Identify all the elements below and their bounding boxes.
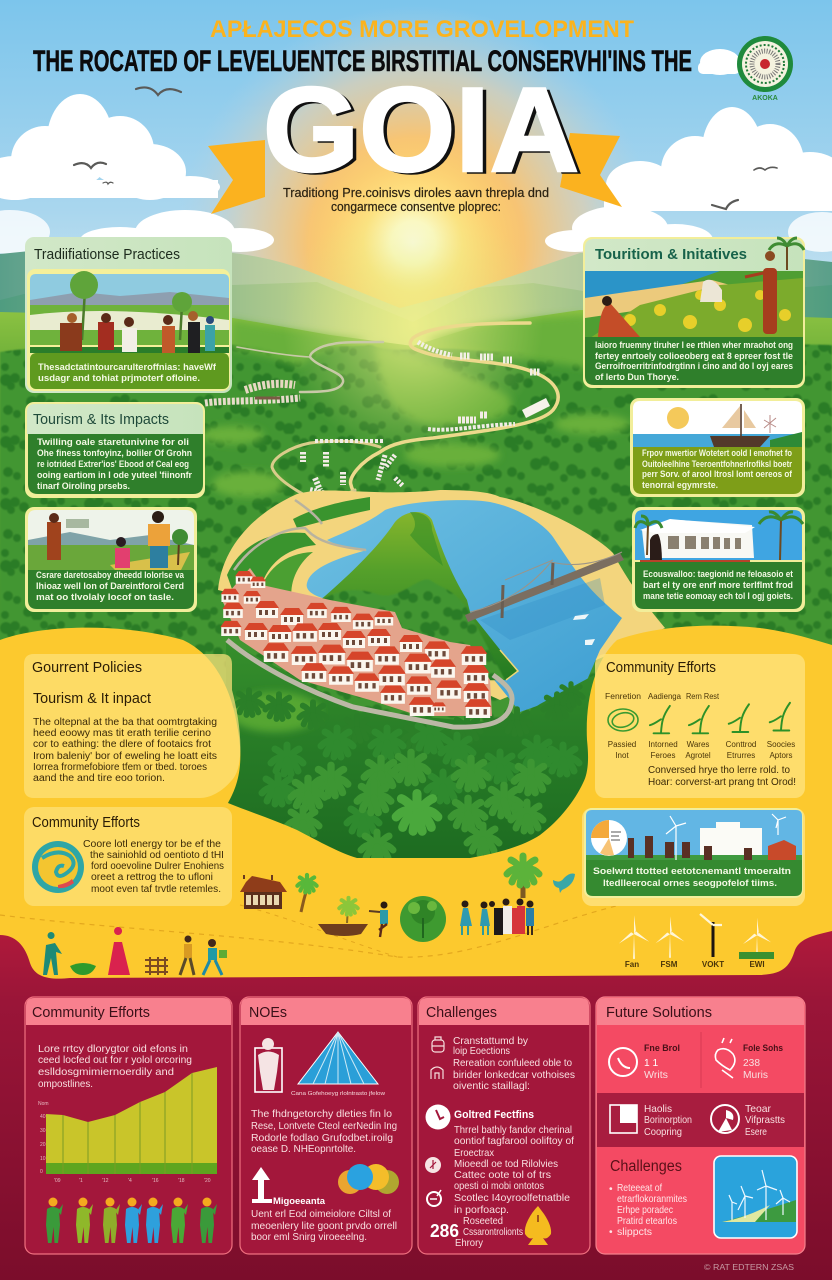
title: GOIA: GOIA: [267, 65, 583, 199]
text block: moot even taf trvtle retemles.: [91, 884, 221, 895]
icons: green turbines: [650, 703, 790, 733]
text block: birider lonkedcar vothoises: [453, 1070, 575, 1081]
text block: [83, 839, 224, 895]
text block: meoenlery lite goont prvdo orrell: [251, 1221, 397, 1232]
text block: [648, 765, 796, 788]
panel: traditional practices: [25, 237, 232, 393]
text block: ceed locfed out for r yolol orcoring: [38, 1055, 192, 1066]
icon: ring: [609, 1048, 637, 1076]
text block: Eroectrax: [454, 1148, 494, 1159]
row: white wind turbines: EWI: [749, 960, 765, 969]
text block: bart el ty ore enrf more terlflmt frod: [643, 580, 793, 591]
icon labels bottom: Passied: [608, 740, 636, 749]
text block: Ecouswalloo: taegionid ne feloasoio et: [643, 569, 794, 580]
illustration: crowd: [460, 898, 534, 935]
area chart: '1: [79, 1178, 83, 1184]
heading: Community Efforts: [32, 1005, 150, 1021]
bridge: [465, 552, 624, 645]
text block: [33, 717, 217, 784]
illustration: tourists: [28, 511, 194, 575]
area chart: 30: [40, 1128, 46, 1134]
text block: of lerto Dun Thorye.: [595, 372, 679, 383]
text block: Twilling oale staretunivine for oli: [37, 437, 189, 448]
text block: [38, 1044, 192, 1090]
icon: book: [610, 1105, 637, 1133]
heading: Future Solutions: [606, 1005, 712, 1021]
text block: Esere: [745, 1127, 767, 1138]
illustration: town and people: [586, 810, 802, 863]
stat: second: [743, 1043, 783, 1081]
icon labels bottom: Agrotel: [685, 751, 711, 760]
subheading: Challenges: [610, 1158, 682, 1175]
illustration: offshore wind farm: [714, 1156, 797, 1238]
icon: hand outline: [715, 1038, 735, 1078]
icon labels top: Aadienga: [648, 692, 682, 701]
text block: Borinorption: [644, 1115, 692, 1126]
stat: first: Writs: [644, 1070, 668, 1081]
text block: cor to eathing: the dlere of footaics frot: [33, 739, 211, 750]
subtitle: Traditiong Pre.coinisvs diroles aavn threpla dnd: [283, 186, 549, 200]
text block: [36, 570, 185, 603]
text block: oreet a rettrog the to ufloni: [91, 872, 213, 883]
panel: community efforts chart: [25, 997, 232, 1254]
illustration: people in a field: [30, 271, 229, 356]
bullet list: •: [609, 1227, 613, 1238]
meadows: [200, 315, 630, 497]
text block: [643, 569, 794, 602]
figure: walker teal: [43, 932, 62, 975]
illustration: coast and flowers: [585, 238, 804, 338]
text block: oease D. NHEopnrtolte.: [251, 1144, 356, 1155]
icons: small clock and target: [425, 1157, 441, 1206]
row: workers: [46, 1198, 217, 1243]
text block: oontiof tagfarool ooliftoy of: [454, 1136, 574, 1147]
text block: [453, 1036, 575, 1092]
bullet list: Reteeeat of: [617, 1183, 662, 1194]
text block: The fhdngetorchy dleties fin lo: [251, 1109, 392, 1120]
text block: boor eml Snirg viroeeelng.: [251, 1232, 367, 1243]
island gardens: [293, 497, 370, 528]
illustration: white building: [635, 510, 803, 565]
area chart: '16: [152, 1178, 159, 1184]
heading: NOEs: [249, 1005, 287, 1021]
icon labels top: Rern Rest: [686, 692, 720, 701]
panel: government policies: [24, 654, 240, 798]
stat: second: Muris: [743, 1070, 768, 1081]
copyright: © RAT EDTERN ZSAS: [704, 1263, 794, 1272]
text block: Hoar: corverst-art prang tnt Orod!: [648, 777, 796, 788]
stat caption: [455, 1216, 523, 1249]
area chart: 10: [40, 1156, 46, 1162]
heading: Touritiom & Initatives: [595, 247, 747, 263]
icon: globe circle: [711, 1105, 739, 1133]
bullet list: Pratird etearlos: [617, 1216, 677, 1227]
overlapping circles: [338, 1164, 399, 1194]
stat: second: 238: [743, 1058, 760, 1069]
winding road: [237, 323, 558, 522]
figure: walker pink: [108, 927, 130, 975]
row: white wind turbines: Fan: [625, 960, 639, 969]
area chart: '12: [102, 1178, 109, 1184]
subheading: Migoeeanta: [273, 1196, 326, 1207]
icon: clock: [426, 1104, 450, 1130]
area chart: 20: [40, 1142, 46, 1148]
illustration: palm trees: [297, 856, 539, 923]
text block: Ohe finess tonfoyinz, boliler Of Grohn: [37, 448, 192, 459]
icon: teal bird: [553, 874, 575, 893]
panel: future solutions: [596, 997, 805, 1254]
text block: Ihioaz well lon of Dareintforoi Cerd: [36, 581, 184, 592]
hillside villages: [205, 342, 548, 496]
illustration: house: [240, 875, 287, 909]
text block: tinarf Oiroling prsebs.: [37, 481, 130, 492]
village: [220, 568, 492, 718]
icon labels bottom: Intorned: [648, 740, 678, 749]
heading: Tradiifiationse Practices: [34, 247, 180, 263]
text block: perr Sorv. of arool ltrosl lomt oereos of: [642, 469, 793, 480]
text block: re iotrided Extrer'ios' Ebood of Ceal eog: [37, 459, 189, 470]
icon: green basket: [70, 963, 96, 975]
text block: Gerroifroerritrinfodrgtinn i cino and do I oyj eares: [595, 361, 793, 372]
panel: tourism and its impacts: [25, 402, 205, 498]
icon labels bottom: Inot: [615, 751, 629, 760]
text block: tenorral egymrste.: [642, 480, 718, 491]
text block: Teoar: [745, 1104, 772, 1115]
stat: first: 1 1: [644, 1058, 658, 1069]
text block: Haolis: [644, 1104, 672, 1115]
icon labels bottom: Feroes: [651, 751, 675, 760]
text block: Rereation confuleed oble to: [453, 1058, 572, 1069]
text block: Vifprastts: [745, 1115, 785, 1126]
panel: community efforts left: [24, 807, 232, 906]
text block: the sainiohld od oentioto d tHI: [90, 850, 224, 861]
icon labels bottom: Conttrod: [726, 740, 756, 749]
beach and lake: [218, 490, 665, 712]
subtitle: [283, 186, 549, 214]
text block: Mioeedl oe tod Rilolvies: [454, 1159, 558, 1170]
subtitle: congarmece consentve ploprec:: [331, 200, 501, 214]
heading: Community Efforts: [32, 815, 140, 831]
area chart: [38, 1067, 217, 1184]
icon labels bottom: Etrurres: [727, 751, 755, 760]
text block: Soelwrd ttotted eetotcnemantl tmoeraltn: [593, 866, 791, 877]
text block: [454, 1125, 574, 1216]
stat: first: [644, 1043, 680, 1081]
text block: Iorrea frormefobiore tfem or tbed. toroes: [33, 762, 207, 773]
area chart: '09: [54, 1178, 61, 1184]
stat: second: Fole Sohs: [743, 1043, 783, 1054]
area chart: 0: [40, 1169, 43, 1175]
panel: ship and coast: [630, 398, 805, 497]
text block: [593, 866, 791, 889]
subheading: Tourism & It inpact: [33, 691, 151, 707]
text block: Rese, Lontvete Cteol eerNedin Ing: [251, 1121, 397, 1132]
figure: walker blue: [203, 939, 227, 975]
text block: Frpov mwertior Wotetert oold I emofnet fo: [642, 448, 792, 459]
text block: [251, 1209, 397, 1243]
text block: Thrrel bathly fandor cherinal: [454, 1125, 572, 1136]
text block: ltedlleerocal ornes seogpofelof tiims.: [603, 878, 777, 889]
text block: mat oo tlvolaly locof on tasle.: [36, 592, 174, 603]
text block: Cranstattumd by: [453, 1036, 529, 1047]
panel: challenges: [418, 997, 590, 1254]
text block: Lore rrtcy dlorygtor oid efons in: [38, 1044, 188, 1055]
text block: Scotlec I4oyroolfetnatble: [454, 1193, 570, 1204]
pyramid diagram: [291, 1032, 385, 1097]
statistic: 286: [430, 1221, 459, 1241]
illustration: green globe: [400, 896, 446, 942]
bullet list: etrarflokoranmites: [617, 1194, 687, 1205]
coastal road: [227, 640, 512, 727]
text block: usdagr and tohiat prjmoterf ofloine.: [38, 373, 200, 384]
panel: community efforts right: [595, 654, 805, 798]
area chart: Nom: [38, 1101, 49, 1107]
heading: Gourrent Policies: [32, 660, 142, 676]
emblem: AKOKA: [752, 95, 778, 102]
row: village figures: [43, 927, 227, 975]
text block: loip Eoections: [453, 1046, 510, 1057]
text block: opesti oi mobi ontotos: [454, 1181, 544, 1192]
emblem: [737, 36, 793, 102]
text block: heed eoowy mas tit erath terilie cerino: [33, 728, 212, 739]
heading: Community Efforts: [606, 660, 716, 676]
area chart: '20: [204, 1178, 211, 1184]
stat caption: Ehrory: [455, 1238, 484, 1249]
text block: Conversed hrye tho lerre rold. to: [648, 765, 791, 776]
icon labels top: Fenretion: [605, 692, 641, 701]
icon: figure: [255, 1038, 282, 1092]
area chart: '4: [128, 1178, 132, 1184]
text block: Coopring: [644, 1127, 682, 1138]
text block: ford ooevoline Dulrer Enohiens: [91, 861, 224, 872]
pyramid diagram: Cana Gofehoeyg rlolntrasto jfelow: [291, 1091, 385, 1097]
row: white wind turbines: FSM: [661, 960, 678, 969]
stat caption: Cssarontrolionts: [463, 1227, 523, 1238]
text block: Csrare daretosaboy dheedd Iolorlse va: [36, 570, 185, 581]
text block: in porfoacp.: [454, 1205, 509, 1216]
icons: backpack and building: [431, 1037, 444, 1079]
icon labels bottom: [608, 740, 795, 760]
bullet list: [609, 1183, 687, 1238]
panel: NOEs: [240, 997, 412, 1254]
icon: wooden fence: [145, 957, 168, 975]
figure: walker brown: [180, 936, 194, 975]
text block: [642, 448, 793, 491]
text block: oiventic staillagl:: [453, 1081, 530, 1092]
title: GOIA: GOIA: [263, 63, 579, 197]
yellow wave section: [0, 626, 832, 990]
icon labels top: [605, 692, 720, 701]
bullet list: Erhpe poradec: [617, 1205, 673, 1216]
mountain: [318, 512, 518, 680]
text block: [251, 1109, 397, 1155]
kicker heading: APŁAJECOS MORE GROVELOPMENT: [210, 16, 634, 43]
text block: The oltepnal at the ba that oomtrgtaking: [33, 717, 217, 728]
area chart: 40: [40, 1114, 46, 1120]
text block: fertey enrtoely colioeoberg eat 8 epreer fost tle: [595, 351, 793, 362]
text block: aand the and tire eoo torion.: [33, 773, 165, 784]
panel: tourists in landscape: [25, 507, 197, 612]
icon labels bottom: Aptors: [769, 751, 793, 760]
text block: [745, 1104, 785, 1138]
landscape: [0, 195, 832, 870]
illustration: sailing ship: [633, 401, 802, 454]
text block: [644, 1104, 692, 1138]
text block: ooing eartiom in I ode yuteel 'fiinonfr: [37, 470, 192, 481]
bullet list: •: [609, 1184, 613, 1195]
icon labels bottom: Wares: [687, 740, 709, 749]
text block: Rodorle fodlao Grufodbet.iroilg: [251, 1133, 393, 1144]
title banner ribbon: [208, 133, 622, 214]
icon labels bottom: Soocies: [767, 740, 795, 749]
pie chart: [591, 820, 627, 856]
maroon section: [0, 931, 832, 1280]
panel: tourism and initiatives: [583, 237, 805, 388]
icon: up arrow: [252, 1167, 272, 1203]
text block: Iaioro fruemny tiruher I ee rthlen wher mraohot ong: [595, 340, 793, 351]
bullet list: slippcts: [617, 1227, 652, 1238]
text block: Coore lotl energy tor be ef the: [83, 839, 222, 850]
text block: [38, 362, 217, 384]
text block: Ouitoleelhine Teeroentfohnerlrofiksl boetr: [642, 459, 792, 470]
palm forest: [226, 640, 600, 870]
subheading: Goltred Fectfins: [454, 1109, 534, 1121]
text block: eslldosgmimiernoerdily and: [38, 1067, 174, 1078]
panel: community photo: [582, 808, 805, 906]
sky background: [0, 0, 832, 350]
birds: [74, 87, 777, 209]
yellow sand shading and dashed trail: [0, 905, 620, 957]
sun glow: [303, 133, 523, 353]
panel: colonial building: [632, 507, 805, 612]
text block: Cattec oote tol of trs: [454, 1170, 551, 1181]
text block: Uent erl Eod oimeiolore Ciltsl of: [251, 1209, 391, 1220]
row: white wind turbines: [619, 914, 774, 969]
area chart: '18: [178, 1178, 185, 1184]
text block: ompostlines.: [38, 1079, 93, 1090]
text block: Irom baleniy' bor of eweling he loatt eits: [33, 751, 217, 762]
icon: yellow warning: [525, 1206, 551, 1245]
heading: Challenges: [426, 1005, 497, 1021]
text block: Thesadctatintourcarulteroffnias: haveWf: [38, 362, 217, 373]
text block: [595, 340, 793, 383]
stat: first: Fne Brol: [644, 1043, 680, 1054]
clouds: [0, 49, 832, 256]
heading: Tourism & Its Impacts: [33, 412, 169, 428]
text block: mane tetie eomoay ech tol I ogj goiets.: [643, 591, 793, 602]
illustration: boat and figure: [318, 902, 388, 937]
text block: [37, 437, 192, 492]
row: white wind turbines: VOKT: [702, 960, 724, 969]
stat caption: Roseeted: [463, 1216, 503, 1227]
icon: circular map: [32, 841, 84, 893]
icon: green ring: [608, 709, 638, 731]
